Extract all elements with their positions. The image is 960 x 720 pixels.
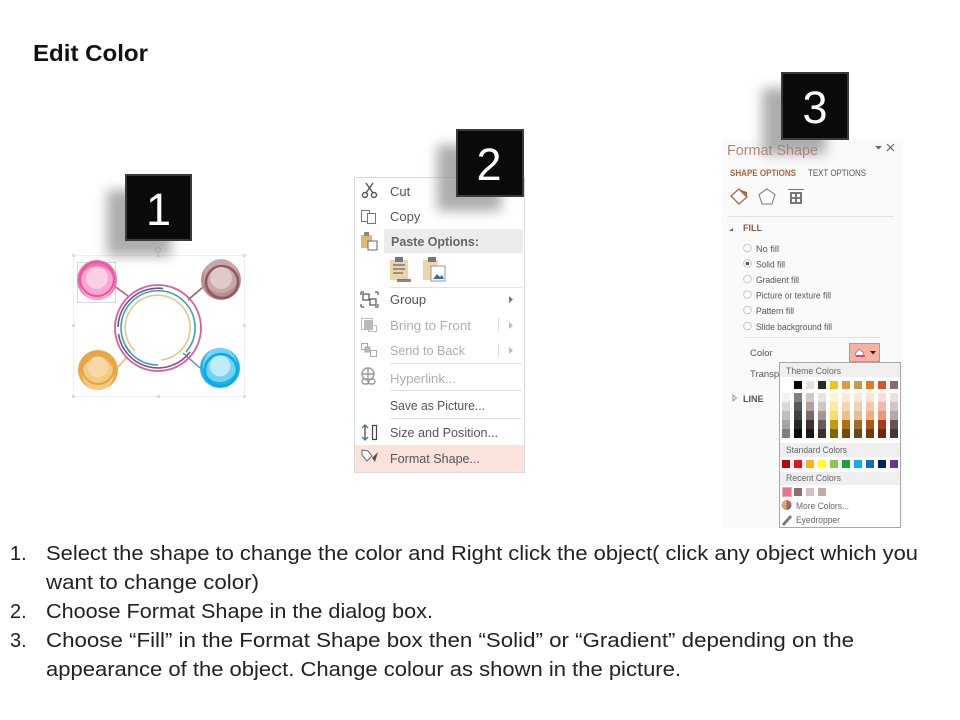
menu item labels: Paste Options: — [391, 234, 479, 249]
picker heading bars — [780, 363, 900, 485]
badge 3 — [762, 72, 849, 154]
icon: layout — [788, 190, 804, 204]
badge 2 — [437, 129, 524, 211]
fill radio options: Gradient fill — [756, 275, 799, 286]
theme shade grid — [782, 393, 898, 438]
color row: Color — [750, 348, 773, 359]
icon: fill bucket — [731, 189, 747, 204]
icon: paste keep text — [390, 257, 411, 282]
panel: color picker dropdown — [780, 362, 900, 528]
instructions list: Select the shape to change the color and Right click the object( click any object which you — [46, 543, 918, 565]
menu item labels: Format Shape... — [390, 451, 480, 466]
fill section heading: FILL — [743, 223, 762, 233]
panel: context menu — [354, 178, 524, 472]
theme color swatches — [782, 381, 898, 389]
menu item labels: Cut — [390, 184, 411, 199]
menu item labels: Group — [390, 292, 426, 307]
icon: hyperlink — [362, 368, 375, 384]
instructions list: 2. — [10, 601, 27, 623]
menu item labels: Hyperlink... — [390, 371, 456, 386]
menu item labels: Save as Picture... — [390, 398, 485, 413]
menu item labels — [390, 184, 498, 466]
transparency label: Transpa — [750, 369, 785, 380]
instructions list: want to change color) — [45, 572, 259, 594]
more colors link: More Colors... — [796, 501, 849, 512]
fill radio options: Solid fill — [756, 260, 785, 270]
icon: size and position — [362, 425, 376, 440]
panel: color picker dropdown: Standard Colors — [786, 445, 847, 456]
icon: scissors — [362, 183, 376, 198]
color row — [750, 344, 880, 362]
pane close controls — [875, 144, 894, 151]
badge 3: 3 — [802, 82, 828, 133]
recent color swatches — [782, 488, 826, 496]
line section heading — [733, 394, 764, 404]
icon: paste — [361, 232, 377, 250]
badge 2: 2 — [476, 139, 502, 190]
node: mauve circle — [201, 259, 241, 300]
paste options highlight — [384, 229, 523, 253]
menu item labels: Copy — [390, 209, 421, 224]
icon: send to back — [362, 344, 376, 356]
connector lines — [113, 285, 203, 368]
badge 1: 1 — [146, 184, 171, 235]
instructions list: Choose Format Shape in the dialog box. — [46, 601, 433, 623]
tabs — [730, 168, 866, 178]
format shape highlight — [355, 445, 524, 472]
tabs: SHAPE OPTIONS — [730, 168, 796, 178]
badge 1 — [107, 174, 192, 256]
title: Edit Color — [33, 40, 148, 66]
instructions list — [10, 543, 918, 681]
icon: eyedropper — [782, 515, 792, 526]
tabs: TEXT OPTIONS — [808, 168, 866, 178]
icon: pentagon — [759, 189, 775, 204]
icon: color wheel — [782, 500, 792, 510]
menu item labels: Bring to Front — [390, 318, 471, 333]
node: blue circle — [200, 348, 240, 388]
fill radio options: Slide background fill — [756, 322, 832, 333]
icon: paste picture — [423, 257, 445, 281]
submenu arrows — [509, 296, 513, 354]
standard color swatches — [782, 460, 898, 468]
instructions list: Choose “Fill” in the Format Shape box then “Solid” or “Gradient” depending on the — [46, 630, 854, 652]
fill radio options: Picture or texture fill — [756, 290, 831, 302]
panel: color picker dropdown: Theme Colors — [786, 366, 841, 377]
instructions list: 3. — [10, 630, 27, 652]
panel: circular diagram selected on slide — [72, 248, 246, 398]
concentric ring arcs — [115, 285, 201, 371]
fill radio options — [744, 244, 832, 333]
icon: format shape — [362, 450, 378, 462]
fill section heading — [729, 223, 762, 233]
eyedropper label: Eyedropper — [796, 515, 840, 526]
panel: format shape pane — [722, 140, 903, 528]
instructions list: 1. — [10, 543, 27, 565]
line section heading: LINE — [743, 394, 764, 404]
menu item labels: Size and Position... — [390, 425, 498, 440]
pane title: Format Shape — [727, 142, 818, 159]
menu item labels: Send to Back — [390, 343, 465, 358]
fill radio options: Pattern fill — [756, 306, 794, 317]
instructions list: appearance of the object. Change colour as shown in the picture. — [46, 659, 681, 681]
node: pink circle — [77, 260, 117, 300]
icon: bring to front — [362, 318, 376, 332]
icon: group — [361, 292, 378, 307]
node: orange circle — [78, 350, 118, 390]
fill radio options: No fill — [756, 244, 779, 255]
panel: color picker dropdown: Recent Colors — [786, 473, 841, 484]
icon: copy — [362, 210, 376, 224]
